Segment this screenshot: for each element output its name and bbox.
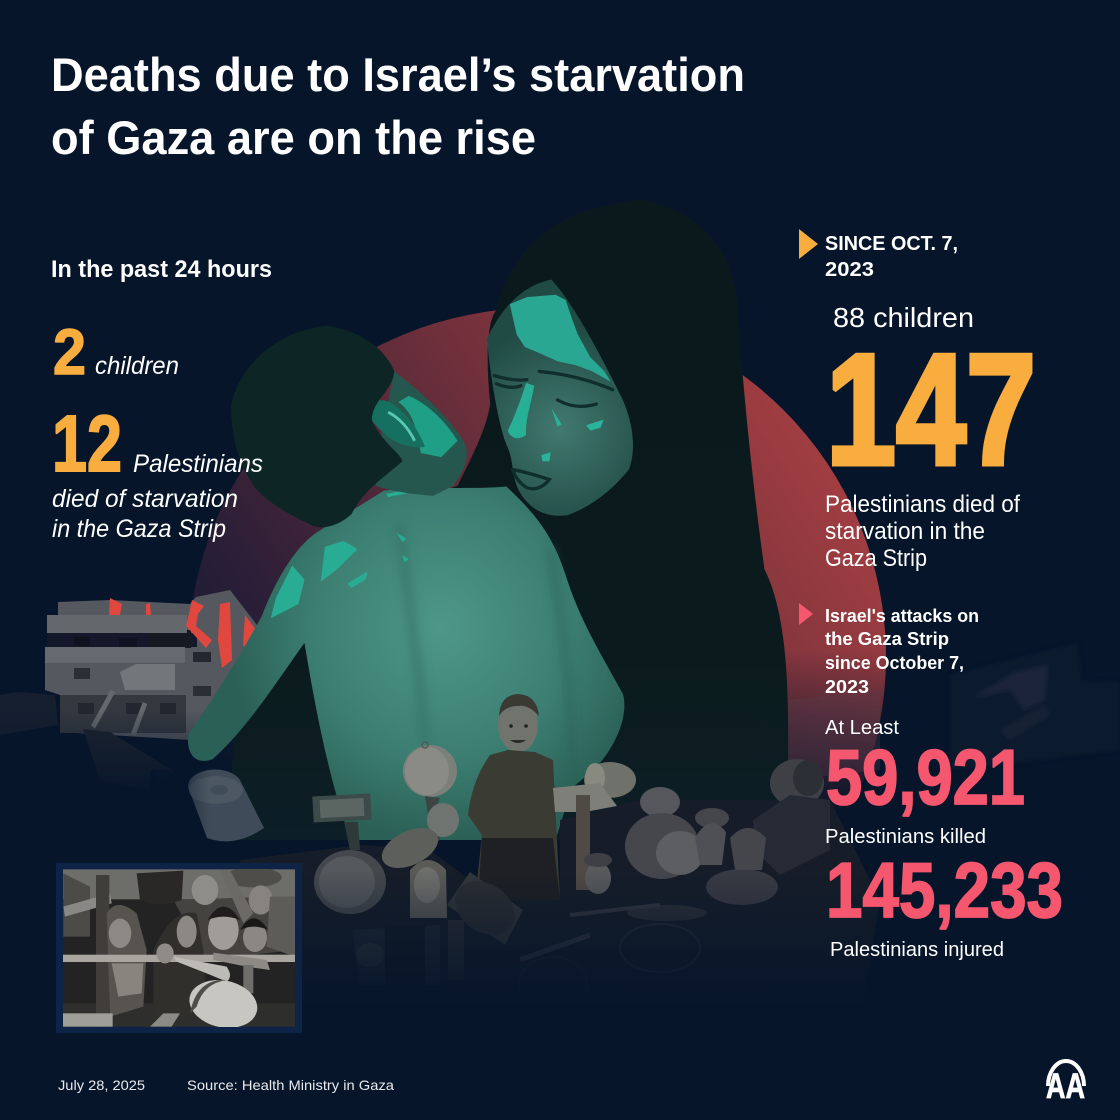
shoulder highlights bbox=[271, 489, 413, 618]
fallen panel bbox=[83, 729, 175, 790]
88 children: 88 children bbox=[833, 302, 974, 333]
subheading: the Gaza Strip bbox=[825, 629, 949, 649]
caption: died of starvation bbox=[52, 485, 238, 513]
building body bbox=[45, 590, 257, 740]
pot, left (cylinder) bbox=[188, 770, 264, 841]
Israel's attacks panel bbox=[799, 603, 1063, 961]
source: Source: Health Ministry in Gaza bbox=[187, 1077, 394, 1093]
Anadolu Agency logo: AA bbox=[1046, 1067, 1085, 1106]
rubble, right bbox=[950, 643, 1120, 770]
since Oct 7 panel bbox=[799, 229, 1036, 572]
faces in crowd bbox=[356, 823, 766, 967]
number injured: 145,233 bbox=[826, 846, 1063, 934]
photo thumbnail bbox=[56, 863, 302, 1034]
caption bbox=[825, 491, 1020, 572]
fade bbox=[0, 710, 280, 800]
icon: orange arrow bbox=[799, 229, 818, 259]
Anadolu Agency logo bbox=[1046, 1061, 1085, 1106]
hanging pan bbox=[403, 742, 459, 845]
number killed: 59,921 bbox=[826, 733, 1025, 821]
stat: 2 children: children bbox=[95, 352, 179, 380]
subheading: SINCE OCT. 7, bbox=[825, 233, 958, 255]
stat: 12 Palestinians: 12 bbox=[52, 399, 122, 488]
boy holding pot bbox=[468, 694, 560, 900]
title bbox=[51, 48, 745, 164]
subheading: 2023 bbox=[825, 259, 874, 281]
red patches bbox=[109, 598, 256, 668]
subheading: 2023 bbox=[825, 677, 869, 697]
crowd with cooking pots bbox=[188, 694, 880, 1020]
forehead highlight bbox=[510, 295, 611, 382]
caption: Palestinians died of bbox=[825, 491, 1020, 518]
cheek highlights bbox=[541, 408, 604, 461]
eyes and lips bbox=[494, 371, 613, 489]
subheading: In the past 24 hours bbox=[51, 256, 272, 283]
caption: Gaza Strip bbox=[825, 545, 927, 572]
caption: in the Gaza Strip bbox=[52, 515, 226, 543]
child's hair bbox=[231, 326, 402, 527]
ruined building, left bbox=[0, 590, 280, 800]
killed label: Palestinians killed bbox=[825, 826, 986, 848]
date: July 28, 2025 bbox=[58, 1077, 145, 1093]
mother's face bbox=[487, 280, 633, 516]
caption: starvation in the bbox=[825, 518, 985, 545]
injured label: Palestinians injured bbox=[830, 939, 1004, 961]
subheading bbox=[825, 233, 958, 281]
spine shadow bbox=[398, 522, 425, 743]
stat: 2 children: 2 bbox=[53, 316, 86, 388]
subheading: since October 7, bbox=[825, 653, 964, 673]
bottom fade bbox=[0, 870, 1120, 1010]
arm divider shadow bbox=[549, 547, 572, 784]
title: of Gaza are on the rise bbox=[51, 111, 536, 164]
caption bbox=[52, 485, 238, 543]
subheading: Israel's attacks on bbox=[825, 606, 979, 626]
mother's hijab bbox=[229, 200, 788, 840]
pots bbox=[314, 759, 830, 1013]
faded building behind, right of circle bbox=[787, 690, 880, 780]
title: Deaths due to Israel’s starvation bbox=[51, 48, 745, 101]
icon: pink arrow bbox=[799, 603, 813, 625]
child's neck and ear bbox=[371, 371, 467, 496]
figures: mother and child (zoom coordinates) bbox=[188, 200, 788, 840]
past 24 hours panel bbox=[51, 256, 272, 543]
number 147: 147 bbox=[826, 322, 1036, 498]
at least: At Least bbox=[825, 717, 899, 739]
nose highlight bbox=[508, 383, 534, 438]
framed photo held up bbox=[312, 794, 372, 850]
child's body bbox=[188, 487, 624, 840]
subheading bbox=[825, 606, 979, 697]
stat: 12 Palestinians bbox=[52, 399, 263, 488]
stat: 2 children bbox=[53, 316, 179, 388]
red circle bbox=[180, 308, 900, 1019]
left side fade bbox=[150, 770, 210, 1020]
dark mass behind crowd bbox=[240, 800, 880, 1020]
distant low building bbox=[0, 692, 58, 735]
stat: 12 Palestinians: Palestinians bbox=[133, 450, 263, 478]
